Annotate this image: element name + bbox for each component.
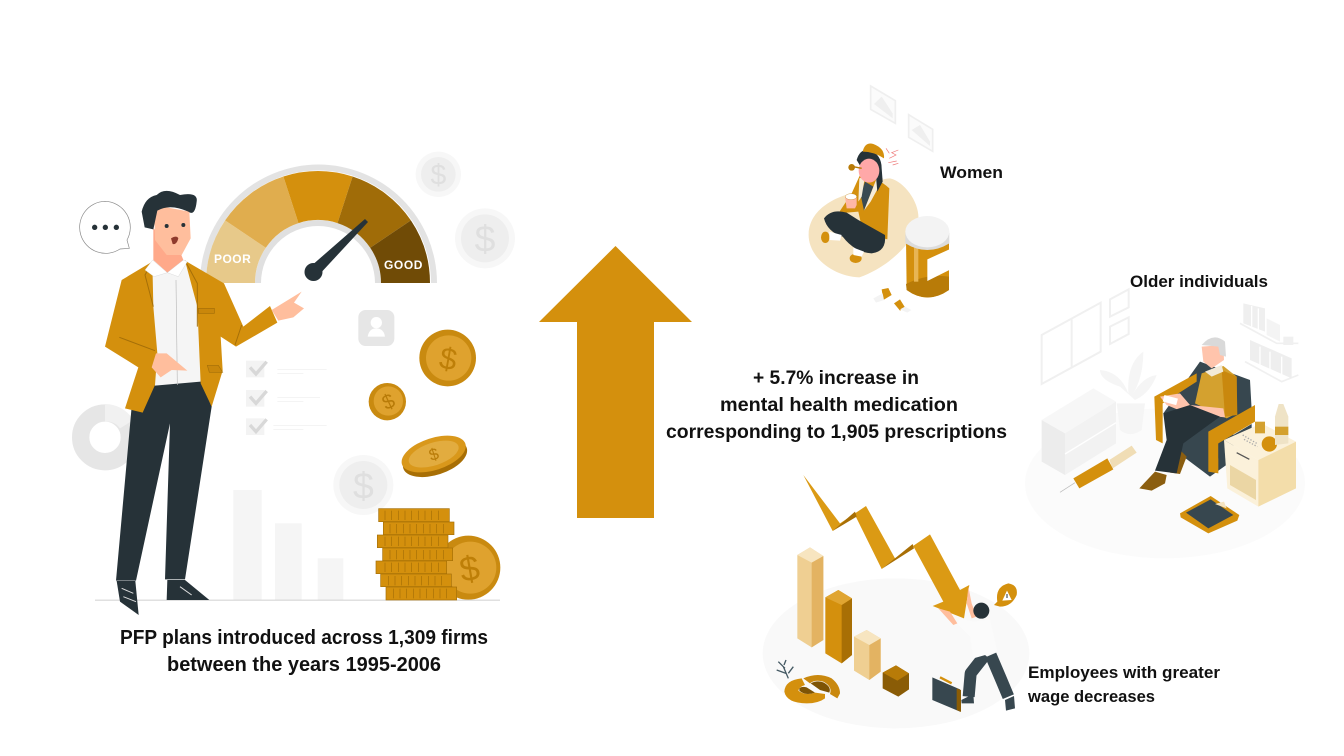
text: central finding: corresponding to 1,905 prescriptions [666, 421, 1007, 443]
icon: tilted gold coin: $ [427, 444, 441, 465]
icon: coin behind stack: $ [457, 548, 483, 590]
icon: armchair [1154, 362, 1255, 477]
label: Employees with greater wage decreases: wage decreases [1027, 688, 1155, 706]
figure: man in gold jacket [105, 191, 304, 615]
figure: sick woman [821, 144, 889, 263]
icon: checklist [246, 361, 327, 435]
icon: speech bubble [80, 201, 130, 253]
label: Employees with greater wage decreases: Employees with greater [1028, 664, 1221, 682]
panel: employees with wage decreases illustration [763, 475, 1029, 728]
gauge label: poor: POOR [214, 252, 251, 266]
icon: ghost dollar coins [333, 152, 515, 515]
chart: grey background donut [81, 404, 133, 462]
icon: briefcase [932, 677, 961, 712]
chart: grey background bars [233, 490, 343, 600]
icon: small gold coin: $ [378, 389, 399, 415]
icon: tilted gold coin [397, 429, 472, 484]
icon: plant sprig [777, 660, 793, 678]
label: Older individuals: Older individuals [1130, 272, 1268, 291]
icon: large gold coin [419, 330, 476, 386]
shape: floor ellipse [763, 578, 1029, 728]
icon: broken pie chart [784, 675, 840, 703]
icon: syringe [1060, 446, 1137, 492]
text: PFP plans caption [120, 627, 488, 676]
gauge label: good: GOOD [384, 258, 423, 272]
text: PFP plans caption: between the years 1995-2006 [167, 654, 441, 676]
arrow: large upward arrow [539, 246, 692, 518]
arrow: falling zigzag arrow [803, 475, 969, 618]
icon: wall pictures [871, 86, 933, 151]
icon: dresser [1042, 388, 1116, 475]
icon: ghost dollar coins: $ [430, 159, 446, 191]
text: PFP plans caption: PFP plans introduced across 1,309 firms [120, 627, 488, 649]
label: Employees with greater wage decreases [1027, 664, 1221, 706]
panel: older individuals illustration [1025, 289, 1305, 558]
icon: warning bubble [994, 583, 1017, 607]
icon: pills [873, 288, 911, 313]
text: central finding [666, 367, 1007, 443]
icon: sickness sparks [886, 148, 898, 165]
icon: coin behind stack [436, 536, 500, 600]
icon: stack of gold coins [376, 509, 457, 600]
icon: large gold coin: $ [437, 341, 459, 378]
figure: older person [1139, 337, 1237, 491]
shape: floor ellipse [1025, 408, 1305, 558]
chart: gauge from poor to good [200, 165, 437, 283]
icon: window and frames [1042, 289, 1129, 384]
icon: ghost dollar coins: $ [353, 464, 374, 506]
panel: women illustration [809, 86, 949, 313]
text: central finding: + 5.7% increase in [753, 367, 919, 389]
shape: cream blob [809, 178, 918, 277]
icon: profile card [358, 310, 394, 346]
panel: PFP performance illustration [80, 152, 515, 615]
icon: ghost dollar coins: $ [475, 218, 496, 260]
icon: pill bottle [905, 216, 949, 297]
icon: small gold coin [369, 383, 406, 420]
icon: shelves with books [1240, 303, 1298, 382]
chart: falling 3D bars [797, 547, 909, 697]
ground line [95, 600, 500, 601]
label: Women: Women [940, 163, 1003, 182]
figure: person holding arrow [938, 587, 1015, 711]
icon: bedside table [1224, 404, 1296, 507]
icon: plant [1100, 352, 1157, 434]
icon: weighing scale [1180, 496, 1239, 533]
gauge needle [304, 219, 368, 281]
text: central finding: mental health medication [720, 394, 958, 416]
